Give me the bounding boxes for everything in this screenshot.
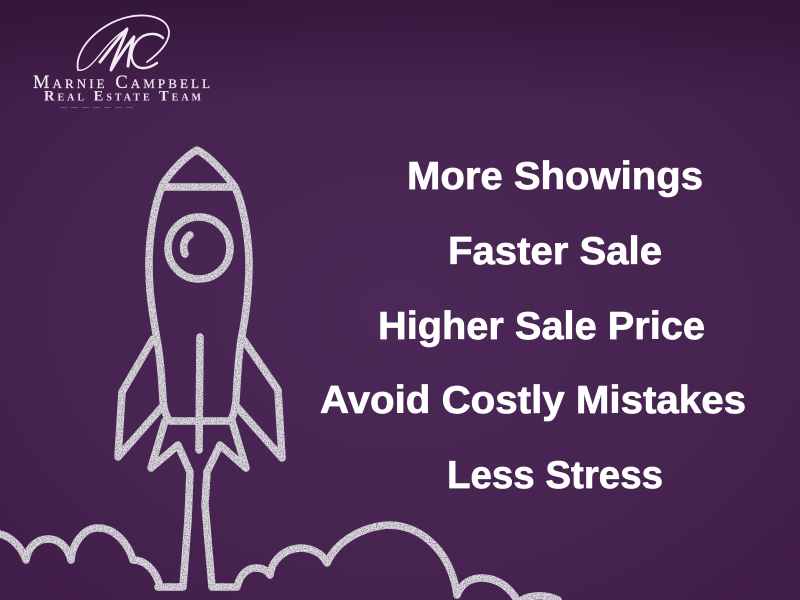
- icon: chalk rocket: [0, 150, 558, 600]
- benefit 3: Higher Sale Price: [378, 305, 705, 348]
- nose band: [165, 183, 235, 191]
- porthole highlight: [184, 235, 190, 254]
- rocket body: [149, 150, 249, 421]
- right flame and legs: [205, 421, 246, 587]
- benefits list: [320, 155, 746, 497]
- icon: MC monogram with oval swoosh: [78, 16, 169, 70]
- logo tagline: Real Estate Team: [44, 88, 202, 104]
- right fin: [237, 339, 282, 458]
- porthole: [168, 217, 230, 279]
- left flame and legs: [151, 421, 190, 587]
- left fin: [118, 339, 162, 457]
- logo name: Marnie Campbell: [33, 73, 210, 93]
- faint dashed rule under logo: [60, 106, 135, 108]
- centre line: [199, 337, 200, 450]
- cloud left: [0, 528, 160, 587]
- benefit 2: Faster Sale: [448, 230, 662, 273]
- logo: Marnie Campbell Real Estate Team: [33, 16, 210, 108]
- benefit 5: Less Stress: [447, 454, 663, 497]
- benefit 1: More Showings: [407, 155, 703, 198]
- cloud right: [237, 525, 517, 600]
- benefit 4: Avoid Costly Mistakes: [320, 379, 746, 422]
